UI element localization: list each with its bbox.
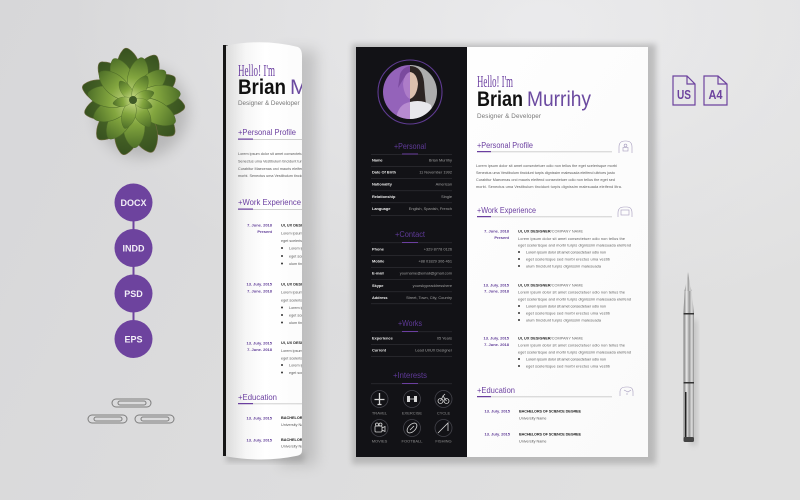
roll: work experience: Lorem ipsum (289, 246, 311, 250)
job 2: eget scelerisque and morbi turpis dignissim malesuada eleifend (518, 298, 631, 302)
sidebar: contact: Phone (372, 246, 385, 252)
sidebar: personal: Name (372, 158, 383, 162)
badge: PSD (114, 274, 152, 312)
job 2 (484, 282, 631, 322)
job 3: eget scelerisque and morbi turpis dignissim malesuada eleifend (518, 350, 631, 354)
icon: succulent plant (79, 46, 188, 158)
degree 2: University Name (519, 440, 547, 444)
sidebar: works: Experience (372, 336, 394, 340)
icon: cycle: CYCLE (437, 410, 450, 416)
section: personal profile: morbi. Senectus uma Vestibulum tincidunt turpis dignissim malesuada eleifend litra. (476, 185, 622, 189)
sidebar: contact: Skype (372, 283, 384, 288)
badge: PSD: PSD (124, 289, 143, 299)
header: name block (477, 72, 591, 120)
black back strip (223, 45, 228, 456)
degree 1 (484, 408, 581, 420)
job 3 (484, 336, 631, 368)
sidebar: personal: Language (372, 206, 391, 211)
sidebar: contact: yourname@email@gmail.com (400, 270, 452, 276)
degree 1: University Name (519, 416, 547, 420)
sheet shadow (352, 44, 656, 464)
roll: personal profile (238, 129, 302, 177)
roll: work experience: UI, UX DESIGNER (281, 224, 313, 228)
job 3: 13. July. 2015 (484, 336, 510, 340)
roll: personal profile: Curabitur Maecenas orci mauris eleifend (238, 167, 305, 171)
roll: work experience (238, 199, 302, 375)
roll: personal profile: Lorem ipsum dolor sit amet consectetuer (238, 152, 306, 156)
sidebar: contact: Address (372, 295, 388, 300)
sidebar: interests: +Interests (393, 370, 427, 380)
badge: INDD (114, 229, 152, 267)
roll header: Hello! I'm (238, 61, 275, 80)
job 1: ulum tincidunt turpis dignissim malesuada (526, 264, 602, 268)
job 2: UI, UX DESIGNER/COMPANY NAME (518, 284, 583, 288)
badge: INDD: INDD (122, 244, 145, 254)
white page (356, 47, 648, 457)
job 1: eget scelerisque and morbi turpis dignissim malesuada eleifend (518, 244, 631, 248)
roll: work experience: Lorem ipsum dolor (281, 232, 313, 236)
job 1: Lorem ipsum dolor sit amet consectetuer odio non (526, 250, 606, 254)
format badges (114, 184, 152, 358)
roll: education: 13. July. 2015 (246, 438, 273, 442)
roll: work experience: UI, UX DESIGNER (281, 341, 313, 345)
icon: US page size (673, 76, 695, 105)
icon: A4 page size (704, 76, 727, 105)
job 1: UI, UX DESIGNER/COMPANY NAME (518, 230, 583, 234)
roll: education: +Education (238, 392, 277, 402)
roll header: M (290, 76, 308, 99)
sidebar: works: +Works (398, 318, 422, 328)
sidebar: contact (371, 229, 452, 304)
sidebar: contact: Mobile (372, 258, 385, 264)
sidebar: personal: +Personal (394, 141, 426, 151)
degree 2: BACHELORS OF SCIENCE DEGREE (519, 432, 581, 436)
header: name block: Brian (477, 88, 523, 111)
job 2: eget scelerisque sed morbi erectus uma vestib (526, 312, 610, 316)
roll: work experience: UI, UX DESIGNER (281, 282, 313, 286)
roll: work experience: eget sceleris (289, 254, 310, 258)
sidebar: personal: 11 November 1992 (419, 170, 452, 174)
sidebar: personal: English, Spanish, French (409, 206, 452, 211)
icon: briefcase (618, 207, 632, 217)
job 3: Lorem ipsum dolor sit amet consectetuer odio non (526, 358, 606, 362)
roll header: Brian (238, 76, 286, 99)
icon: paper clips (88, 399, 174, 423)
section: education: +Education (477, 385, 515, 395)
icon: fishing: FISHING (435, 438, 452, 444)
main resume sheet (352, 44, 656, 464)
job 1: Present (494, 235, 510, 240)
header: name block: Designer & Developer (477, 113, 541, 120)
roll: work experience: +Work Experience (238, 197, 301, 207)
roll: work experience: Present (257, 229, 273, 234)
sidebar: personal: Date Of Birth (372, 170, 397, 174)
sidebar: works: Current (372, 348, 387, 352)
roll: education: 13. July. 2015 (246, 416, 273, 420)
section: personal profile (476, 140, 632, 189)
connector line (132, 202, 134, 339)
icon: exercise: EXERCISE (402, 410, 422, 416)
icon: travel: TRAVEL (372, 410, 388, 416)
degree 2 (484, 432, 581, 444)
icon: US page size: US (677, 87, 691, 102)
rolled resume (223, 38, 330, 465)
sidebar: interests (371, 370, 452, 444)
roll: work experience: eget scelerisque (281, 298, 308, 302)
roll: work experience: ulum tincidunt (289, 262, 313, 266)
sidebar: contact: +329 8778 0126 (424, 246, 452, 252)
sidebar: works: 05 Years (437, 336, 452, 340)
roll header: Designer & Developer (238, 100, 300, 107)
panel: sidebar (356, 47, 467, 457)
job 2: ulum tincidunt turpis dignissim malesuada (526, 318, 602, 322)
sidebar: works (371, 318, 453, 357)
sidebar: personal: American (436, 182, 452, 186)
roll: work experience: eget sceleris (289, 314, 310, 318)
roll: work experience: 7. June. 2018 (247, 222, 273, 228)
badge: DOCX (114, 184, 152, 222)
icon: graduation cap (620, 387, 633, 396)
roll: work experience: Lorem ipsum dolor (281, 290, 313, 294)
roll: work experience: eget sceleris (289, 371, 310, 375)
sidebar: personal: Single (441, 194, 452, 199)
badge: DOCX: DOCX (120, 198, 147, 208)
roll: personal profile: +Personal Profile (238, 127, 296, 137)
job 1: 7. June. 2018 (484, 228, 510, 234)
roll: work experience: 13. July. 2015 (246, 282, 273, 286)
roll: work experience: ulum tincidunt (289, 321, 313, 325)
sidebar: contact: yourskypeaddresshere (413, 283, 452, 288)
job 2: Lorem ipsum dolor sit amet consectetuer odio non (526, 304, 606, 308)
roll paper (226, 42, 302, 460)
job 1: Lorem ipsum dolor sit amet consectetuer odio non tellus the (518, 237, 625, 241)
sidebar: contact: Street, Town, City, Country (406, 295, 452, 300)
sidebar: personal: Brian Murrihy (429, 158, 452, 162)
roll: work experience: Lorem ipsum dolor (281, 349, 313, 353)
badge: EPS: EPS (124, 334, 143, 344)
sidebar: contact: +Contact (395, 229, 426, 239)
badge: EPS (114, 320, 152, 358)
job 2: Lorem ipsum dolor sit amet consectetuer odio non tellus the (518, 290, 625, 294)
roll: education (238, 394, 302, 448)
section: personal profile: Senectus uma Vestibulum tincidunt turpis dignissim malesuada eleifend ultrices justo (476, 171, 615, 175)
roll: work experience: Lorem ipsum (289, 364, 311, 368)
job 3: Lorem ipsum dolor sit amet consectetuer odio non tellus the (518, 344, 625, 348)
roll: work experience: eget scelerisque (281, 239, 308, 243)
header: name block: Murrihy (527, 88, 591, 111)
sidebar: personal: Relationship (372, 194, 396, 199)
job 2: 7. June. 2018 (484, 288, 510, 294)
degree 1: 13. July. 2015 (484, 408, 511, 414)
roll: personal profile: morbi. Senectus uma Vestibulum tincidunt (238, 174, 309, 178)
degree 2: 13. July. 2015 (484, 432, 511, 436)
section: work experience: +Work Experience (477, 205, 536, 215)
roll: work experience: Lorem ipsum (289, 306, 311, 310)
icon: A4 page size: A4 (708, 87, 723, 102)
roll: work experience: 7. June. 2018 (247, 347, 273, 352)
roll: work experience: eget scelerisque (281, 356, 308, 360)
sidebar: works: Lead UI/UX Designer (415, 348, 453, 352)
sidebar: personal (371, 141, 452, 216)
roll: work experience: 7. June. 2018 (247, 288, 273, 294)
roll: work experience: 13. July. 2015 (246, 340, 273, 346)
roll header (238, 64, 302, 106)
roll shadow (280, 50, 316, 465)
sidebar: personal: Nationality (372, 182, 393, 186)
profile photo (378, 60, 442, 124)
job 3: 7. June. 2018 (484, 342, 510, 347)
sidebar: contact: +88 01829 306 461 (418, 258, 452, 264)
roll: education: BACHELORS OF SCIENCE (281, 416, 330, 420)
header: name block: Hello! I'm (477, 72, 513, 91)
section: education (477, 385, 633, 444)
section: work experience (477, 205, 632, 368)
roll: personal profile: Senectus uma Vestibulum tincidunt turpis (238, 160, 307, 164)
job 3: UI, UX DESIGNER/COMPANY NAME (518, 336, 583, 340)
section: personal profile: Lorem ipsum dolor sit amet consectetuer odio non tellus the eget scelerisque morbi (476, 164, 617, 168)
job 2: 13. July. 2015 (484, 282, 510, 288)
roll: education: BACHELORS OF SCIENCE (281, 438, 330, 442)
section: personal profile: Curabitur Maecenas orci mauris eleifend consectetuer odio non tellus the eget sed (476, 178, 615, 182)
icon: football: FOOTBALL (402, 438, 423, 444)
job 3: eget scelerisque sed morbi erectus uma vestib (526, 364, 610, 368)
icon: lock (619, 141, 632, 153)
roll: education: University Name (281, 423, 309, 427)
icon: silver pen (684, 272, 697, 445)
degree 1: BACHELORS OF SCIENCE DEGREE (519, 410, 581, 414)
roll: education: University Name (281, 444, 309, 448)
job 1 (484, 228, 631, 268)
section: personal profile: +Personal Profile (477, 140, 533, 150)
sidebar: contact: E-mail (372, 270, 384, 276)
job 1: eget scelerisque sed morbi erectus uma vestib (526, 258, 610, 262)
icon: movies: MOVIES (372, 438, 388, 444)
